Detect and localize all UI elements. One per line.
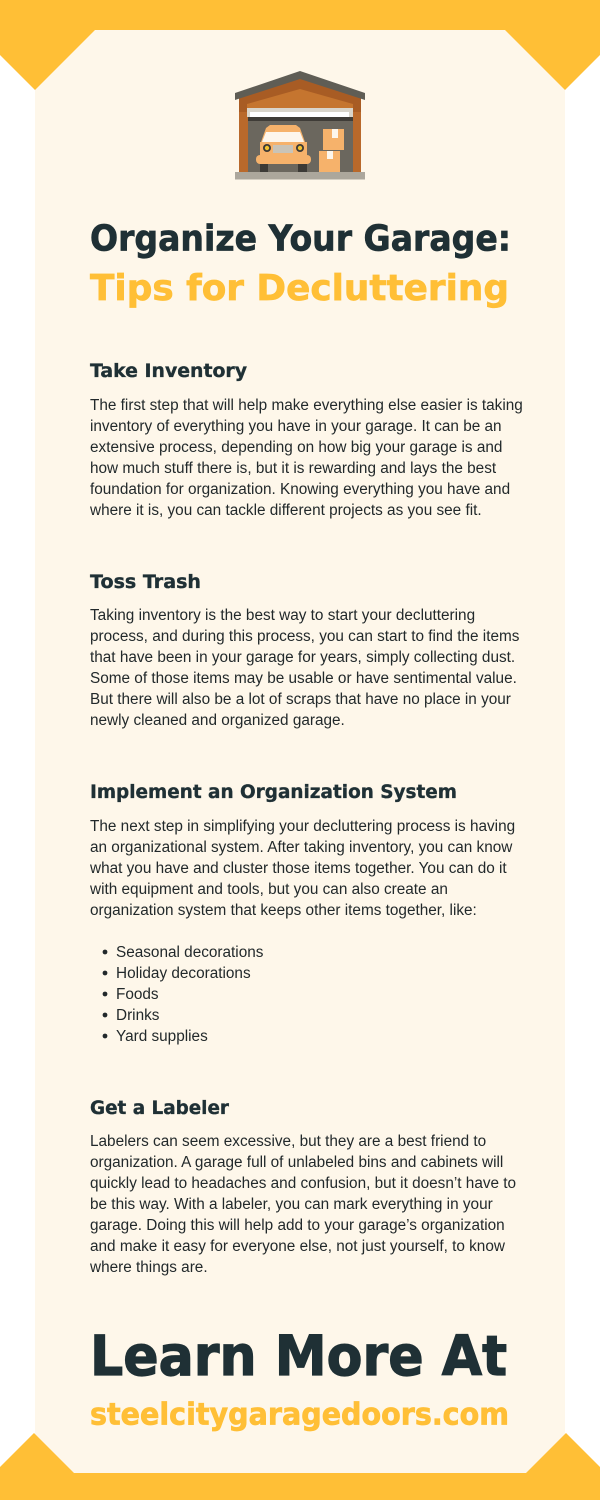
text block: Toss Trash: Some of those items may be usable or have sentimental value. xyxy=(90,670,517,687)
heading: Get a Labeler: Get a Labeler xyxy=(90,1097,230,1119)
text block: Take Inventory: extensive process, depending on how big your garage is and xyxy=(90,439,502,456)
top yellow banner xyxy=(0,0,600,90)
text block: Get a Labeler: quickly lead to headaches and confusion, but it doesn’t have to xyxy=(90,1175,516,1192)
title: Tips for Decluttering xyxy=(90,268,509,309)
text block: Get a Labeler: Labelers can seem excessive, but they are a best friend to xyxy=(90,1133,486,1150)
text block: Implement an Organization System: The next step in simplifying your decluttering process is having xyxy=(90,818,515,835)
text block: Toss Trash: process, and during this process, you can start to find the items xyxy=(90,628,520,645)
website url: steelcitygaragedoors.com xyxy=(90,1398,509,1432)
call to action heading: Learn More At xyxy=(90,1324,507,1388)
text block: Take Inventory: foundation for organization. Knowing everything you have and xyxy=(90,481,510,498)
heading: Take Inventory: Take Inventory xyxy=(90,360,248,382)
text block: Toss Trash: that have been in your garage for years, simply collecting dust. xyxy=(90,649,515,666)
bottom yellow banner xyxy=(0,1433,600,1500)
text block: Take Inventory: The first step that will help make everything else easier is taking xyxy=(90,397,523,414)
text block: Implement an Organization System xyxy=(89,818,515,919)
text block: Toss Trash: newly cleaned and organized garage. xyxy=(90,712,345,729)
text block: Toss Trash: Taking inventory is the best way to start your decluttering xyxy=(90,607,475,624)
title: Organize Your Garage: xyxy=(90,218,511,260)
text block: Take Inventory: where it is, you can tackle different projects as you see fit. xyxy=(89,502,482,519)
icon: garage with car and boxes xyxy=(235,71,365,180)
text block: Get a Labeler: be this way. With a labeler, you can mark everything in your xyxy=(90,1196,493,1213)
text block: Toss Trash xyxy=(90,607,520,729)
title xyxy=(90,218,511,309)
text block: Get a Labeler: where things are. xyxy=(89,1259,208,1276)
text block: Take Inventory: inventory of everything you have in your garage. It can be an xyxy=(90,418,502,435)
heading: Implement an Organization System: Implement an Organization System xyxy=(90,781,457,803)
text block: Toss Trash: But there will also be a lot of scraps that have no place in your xyxy=(90,691,511,708)
text block: Implement an Organization System: organization system that keeps other items together, like: xyxy=(90,902,477,919)
bullet list: Seasonal decorations xyxy=(116,944,264,961)
bullet list: Yard supplies xyxy=(116,1028,208,1045)
text block: Get a Labeler: organization. A garage full of unlabeled bins and cabinets will xyxy=(90,1154,503,1171)
text block: Get a Labeler: garage. Doing this will help add to your garage’s organization xyxy=(90,1217,505,1234)
text block: Get a Labeler xyxy=(89,1133,516,1276)
bullet list: Holiday decorations xyxy=(116,965,251,982)
heading: Toss Trash: Toss Trash xyxy=(90,571,201,593)
text block: Implement an Organization System: with equipment and tools, but you can also create an xyxy=(89,881,448,898)
bullet list xyxy=(103,944,264,1045)
bullet list: Drinks xyxy=(116,1007,160,1024)
text block: Implement an Organization System: an organizational system. After taking inventory, you can know xyxy=(90,839,513,856)
text block: Get a Labeler: and make it easy for everyone else, not just yourself, to know xyxy=(90,1238,506,1255)
bullet list: Foods xyxy=(116,986,159,1003)
text block: Take Inventory xyxy=(89,397,523,519)
text block: Take Inventory: how much stuff there is, but it is rewarding and lays the best xyxy=(90,460,497,477)
text block: Implement an Organization System: what you have and cluster those items together. You can do it xyxy=(89,860,507,877)
